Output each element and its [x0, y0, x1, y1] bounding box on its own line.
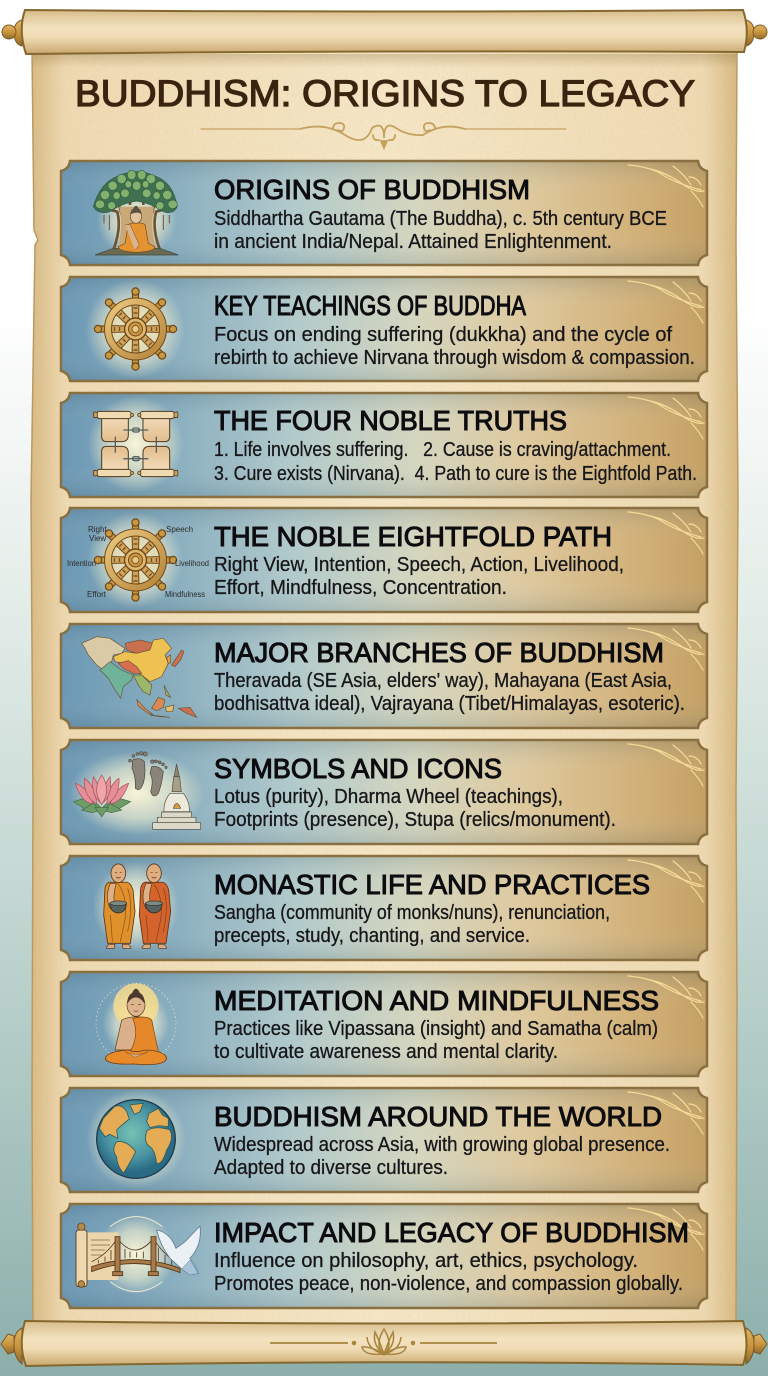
- description: Theravada (SE Asia, elders' way), Mahayana (East Asia,: [214, 670, 672, 692]
- description: Effort, Mindfulness, Concentration.: [214, 577, 507, 599]
- title: BUDDHISM: ORIGINS TO LEGACY: [75, 73, 695, 114]
- panel: major branches: [61, 624, 707, 728]
- heading: SYMBOLS AND ICONS: [214, 753, 502, 784]
- icon: labelled eight-spoke wheel: Effort: [87, 590, 107, 599]
- description: Lotus (purity), Dharma Wheel (teachings),: [214, 786, 563, 808]
- icon: labelled eight-spoke wheel: Speech: [166, 525, 193, 534]
- heading: THE NOBLE EIGHTFOLD PATH: [214, 521, 612, 552]
- icon: labelled eight-spoke wheel: Mindfulness: [165, 590, 205, 599]
- icon: four linked scrolls: [87, 396, 184, 492]
- icon: two monks with alms bowls: [93, 862, 179, 952]
- icon: Buddha under Bodhi tree: [93, 170, 178, 258]
- description: Focus on ending suffering (dukkha) and the cycle of: [214, 324, 672, 346]
- icon: labelled eight-spoke wheel: Intention: [67, 559, 96, 568]
- icon: meditating Buddha: [96, 983, 176, 1065]
- icon: lotus, footprints and stupa: [68, 752, 205, 835]
- lotus ornament: [270, 1329, 497, 1354]
- description: 1. Life involves suffering. 2. Cause is craving/attachment.: [214, 439, 671, 461]
- description: Promotes peace, non-violence, and compassion globally.: [214, 1273, 683, 1295]
- panel: around the world: [61, 1088, 707, 1192]
- description: in ancient India/Nepal. Attained Enlightenment.: [214, 231, 612, 253]
- icon: labelled eight-spoke wheel: View: [89, 534, 106, 543]
- top scroll roller: [2, 10, 767, 54]
- heading: THE FOUR NOBLE TRUTHS: [214, 405, 567, 436]
- icon: scroll, bridge and dove: [76, 1214, 200, 1294]
- heading: MONASTIC LIFE AND PRACTICES: [214, 869, 650, 900]
- description: [214, 439, 697, 485]
- description: [214, 786, 616, 831]
- description: Footprints (presence), Stupa (relics/monument).: [214, 809, 616, 831]
- description: to cultivate awareness and mental clarity.: [214, 1041, 558, 1063]
- description: precepts, study, chanting, and service.: [214, 925, 530, 947]
- heading: MAJOR BRANCHES OF BUDDHISM: [214, 637, 664, 668]
- icon: dharma wheel: [85, 279, 185, 379]
- panel: symbols and icons: [61, 740, 707, 844]
- heading: BUDDHISM AROUND THE WORLD: [214, 1101, 662, 1132]
- panel: noble eightfold path: [61, 508, 707, 612]
- icon: labelled eight-spoke wheel: Livelihood: [175, 559, 209, 568]
- description: Siddhartha Gautama (The Buddha), c. 5th century BCE: [214, 208, 667, 230]
- description: [214, 670, 685, 715]
- description: bodhisattva ideal), Vajrayana (Tibet/Himalayas, esoteric).: [214, 693, 685, 715]
- icon: globe: [86, 1089, 186, 1189]
- heading: MEDITATION AND MINDFULNESS: [214, 985, 659, 1016]
- icon: labelled eight-spoke wheel: [67, 512, 209, 608]
- panel: key teachings: [61, 277, 707, 381]
- icon: labelled eight-spoke wheel: Right: [88, 525, 107, 534]
- panel: impact and legacy: [61, 1204, 707, 1308]
- description: [214, 1250, 683, 1295]
- description: [214, 324, 695, 369]
- description: [214, 554, 624, 599]
- heading: IMPACT AND LEGACY OF BUDDHISM: [214, 1217, 689, 1248]
- description: [214, 208, 667, 253]
- panel: four noble truths: [61, 393, 707, 497]
- title ornament: [201, 123, 566, 148]
- description: Widespread across Asia, with growing global presence.: [214, 1134, 670, 1156]
- panel: monastic life: [61, 856, 707, 960]
- description: Sangha (community of monks/nuns), renunciation,: [214, 902, 610, 924]
- panel: origins of Buddhism: [61, 161, 707, 265]
- description: [214, 902, 610, 947]
- bottom scroll roller: [1, 1321, 767, 1366]
- description: [214, 1134, 670, 1179]
- description: [214, 1018, 658, 1063]
- description: rebirth to achieve Nirvana through wisdom & compassion.: [214, 347, 695, 369]
- description: Adapted to diverse cultures.: [214, 1157, 448, 1179]
- description: Influence on philosophy, art, ethics, psychology.: [214, 1250, 638, 1272]
- description: Practices like Vipassana (insight) and Samatha (calm): [214, 1018, 658, 1040]
- panel: meditation: [61, 972, 707, 1076]
- heading: ORIGINS OF BUDDHISM: [214, 174, 530, 205]
- heading: KEY TEACHINGS OF BUDDHA: [214, 290, 526, 321]
- description: 3. Cure exists (Nirvana). 4. Path to cure is the Eightfold Path.: [214, 463, 697, 485]
- description: Right View, Intention, Speech, Action, Livelihood,: [214, 554, 624, 576]
- icon: map of Asia: [82, 637, 197, 717]
